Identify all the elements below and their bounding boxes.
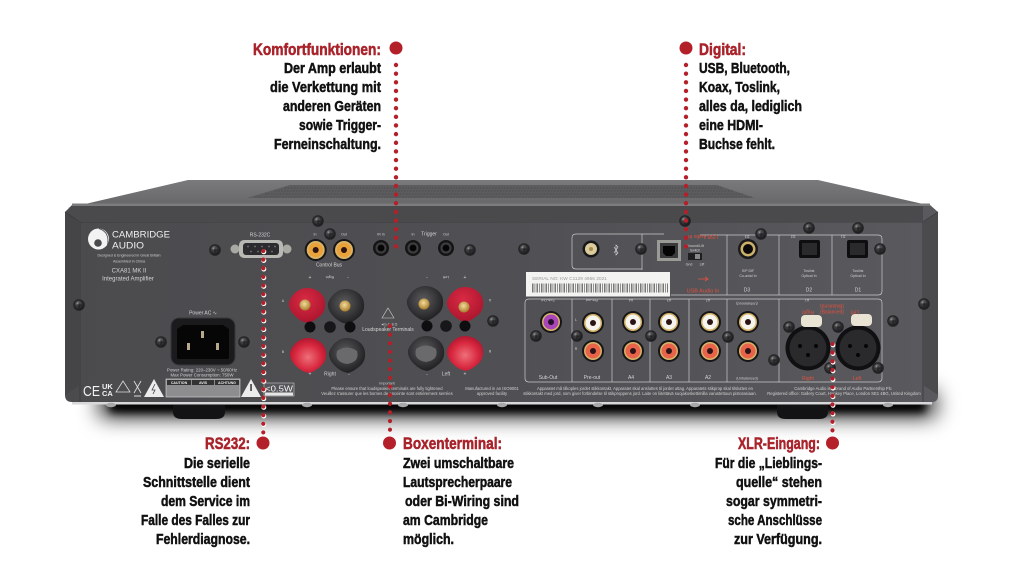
leader line: Boxenterminal [383,326,396,450]
serial number sticker: SERIAL NO: KW C1129 4956 2021 [532,276,607,282]
regulatory markings: <0.5W [265,384,293,394]
text block: XLR-Eingang: zur Verfügung. [734,532,822,548]
brand name: CAMBRIDGE [112,230,170,240]
IR and trigger jacks: IR In [377,232,385,236]
left speaker terminals [407,275,491,378]
text block: Komfortfunktionen: anderen Geräten [283,99,381,115]
pre-out sockets: R [575,347,578,351]
right speaker terminals [282,275,365,378]
regulatory markings: ACHTUNG [218,381,236,385]
USB panel: Switch [690,248,700,252]
power inlet: Max Power Consumption: 750W [171,372,234,378]
legal small print: Apparatet må tilkoples jordet stikkontakt. Apparatet skal ansluttes til jordet uttag. Apparatets stikprop skal tilsluttes en [537,386,754,391]
heading: Komfortfunktionen: Komfortfunktionen: [253,41,381,59]
A1 unbalanced sockets: (Unbalanced) [736,302,758,306]
D3 coaxial input: D3 [745,235,749,239]
Control Bus sockets: Out [341,232,347,236]
text block: XLR-Eingang: sogar symmetri- [726,494,822,510]
XLR sockets [786,298,880,382]
leader line: Komfortfunktionen [390,42,402,248]
chassis rear face [65,205,938,402]
A1 unbalanced sockets [736,302,759,380]
serial number sticker [526,272,670,296]
callout: Boxenterminal [403,435,519,548]
legal small print: approved facility [477,391,508,396]
D1 optical input [841,235,868,294]
digital input panels [727,235,882,295]
legal small print [321,382,921,396]
right speaker terminals: Right [324,372,336,378]
text block: Digital: alles da, lediglich [699,99,802,115]
USB panel: Ground/Lift [686,244,704,248]
A4 sockets [622,298,644,381]
USB panel: Lift [700,262,704,266]
power inlet [167,310,237,378]
right speaker terminals: Right [326,275,334,279]
text block: Boxenterminal [403,456,519,548]
XLR sockets: Left [850,309,859,315]
regulatory markings: CE [83,383,100,400]
text block: RS232 [141,456,250,548]
A2 sockets [699,298,721,381]
text block: RS232: Die serielle [184,456,250,472]
left speaker terminals: - [426,275,428,281]
XLR sockets: Right [802,376,814,382]
D2 optical input: D2 [806,288,812,294]
D3 coaxial input: D3 [744,288,750,294]
text block: RS232: Schnittstelle dient [143,475,250,491]
XLR sockets: A1 [805,298,809,302]
sub-out socket: Sub-Out [541,298,555,302]
A3 sockets: A3 [667,298,671,302]
model text: CXA81 MK II [112,268,147,274]
analog input panels [525,298,882,382]
XLR sockets: (Balanced) [820,310,844,316]
right speaker terminals: - [348,372,350,378]
regulatory markings: CA [102,389,113,398]
icon: Cambridge Audio logo [88,228,109,250]
text block: XLR-Eingang: Für die „Lieblings- [715,456,822,472]
IR and trigger jacks: Out [443,232,449,236]
text block: Boxenterminal: Lautsprecherpaare [403,475,512,491]
A3 sockets [658,298,680,381]
loudspeaker terminal label [362,308,414,333]
XLR sockets: Right [802,309,814,315]
panel screws [73,215,930,374]
text block: RS232: Falle des Falles zur [141,513,250,529]
bluetooth panel [572,234,642,269]
USB panel: Gnd [686,262,692,266]
regulatory markings: AVIS [199,381,208,385]
text block: Komfortfunktionen [270,61,381,153]
right speaker terminals: + [309,372,312,378]
legal small print: Veuillez s'assurer que les bornes de enceinte sont entièrement serrées [321,391,453,396]
legal small print: Registered office: Gallery Court, Hankey Place, London SE1 4BG, United Kingdom [767,391,921,396]
callout: Komfortfunktionen [253,41,381,153]
A2 sockets: A2 [705,375,711,381]
XLR sockets: Left [853,376,862,382]
brand name: AUDIO [112,240,144,252]
Control Bus sockets: Control Bus [316,262,343,268]
D2 optical input [791,235,820,294]
sub-out socket: Sub-Out [539,375,558,381]
D3 coaxial input [738,235,758,294]
RS-232C connector [230,232,292,258]
heading: RS232: RS232: [205,435,250,453]
text block: Boxenterminal: am Cambridge [403,513,488,529]
A2 sockets: A2 [706,298,710,302]
right speaker terminals: + [309,275,312,281]
A1 unbalanced sockets: (Unbalanced) [736,376,758,380]
XLR sockets: (Balanced) [820,303,844,309]
left speaker terminals: Left [443,275,449,279]
power inlet: Power AC ∿ [189,310,217,316]
text block: Komfortfunktionen: Ferneinschaltung. [274,137,381,153]
callout: XLR-Eingang [715,435,822,548]
right speaker terminals: A [282,299,285,303]
left speaker terminals: Left [442,372,451,378]
D2 optical input: Toslink [804,269,815,273]
text block: Digital: Buchse fehlt. [699,137,775,153]
pre-out sockets [575,298,604,381]
Control Bus sockets: In [314,232,316,236]
heading: Digital: Digital: [699,41,746,59]
D3 coaxial input: S/P DIF [742,269,755,273]
IR and trigger jacks: Trigger [421,232,437,238]
right speaker terminals: - [347,275,349,281]
amplifier feet [173,405,828,419]
text block: Boxenterminal: oder Bi-Wiring sind [405,494,519,510]
text block: Digital: USB, Bluetooth, [699,61,790,77]
A4 sockets: A4 [628,375,634,381]
left speaker terminals: + [464,372,467,378]
legal small print: Manufactured in an ISO9001 [465,386,519,391]
ventilation grille [247,185,755,198]
D1 optical input: D1 [841,235,845,239]
callout: RS232 [141,435,250,548]
brand name [112,230,170,252]
D1 optical input: D1 [855,288,861,294]
text block: RS232: dem Service im [161,494,250,510]
A4 sockets: A4 [629,298,633,302]
heading: Boxenterminal: Boxenterminal: [403,435,502,453]
leader line: XLR-Eingang [826,344,839,450]
text block: XLR-Eingang [715,456,822,548]
RS-232C connector: RS-232C [250,232,271,238]
brand block [88,228,170,282]
regulatory markings: UK [102,382,113,391]
text block: Digital: Koax, Toslink, [699,80,780,96]
text block: Komfortfunktionen: Der Amp erlaubt [284,61,381,77]
A3 sockets: A3 [666,375,672,381]
legal small print: Important [379,382,395,386]
IR and trigger jacks: In [412,232,414,236]
right speaker terminals: B [282,350,285,354]
text block: Boxenterminal: möglich. [403,532,454,548]
amplifier top cover [68,180,932,208]
USB panel [642,233,727,295]
left speaker terminals: + [464,275,467,281]
callout: Digital [699,41,802,153]
rubber nubs [106,403,893,407]
leader line: Digital [680,42,692,248]
model text: Designed & Engineered in Great Britain [98,254,160,258]
sub-out socket [539,298,562,381]
left speaker terminals: A [488,298,491,302]
legal small print: Cambridge Audio is a brand of Audio Partnership Plc [794,386,892,391]
pre-out sockets: L [575,318,577,322]
loudspeaker terminal label: Loudspeaker Terminals [362,327,414,333]
amplifier rear panel [65,180,938,407]
model text [98,254,160,282]
text block: RS232: Fehlerdiagnose. [156,532,250,548]
text block: Digital [699,61,802,153]
D1 optical input: Optical In [850,274,866,278]
text block: Boxenterminal: Zwei umschaltbare [403,456,514,472]
USB panel: USB Audio In [688,233,718,239]
text block: Komfortfunktionen: sowie Trigger- [299,118,381,134]
USB panel: USB Audio In [687,288,719,294]
model text: Assembled in China [113,260,145,264]
left speaker terminals: - [426,372,428,378]
text block: XLR-Eingang: sche Anschlüsse [728,513,822,529]
IR and trigger jacks [373,232,454,256]
legal small print: Please ensure that loudspeaker terminals are fully tightened [331,386,443,391]
D3 coaxial input: Co-axial In [739,274,757,278]
D1 optical input: Toslink [853,269,864,273]
D2 optical input: D2 [791,235,795,239]
text block: XLR-Eingang: quelle“ stehen [736,475,822,491]
power inlet: Power Rating: 220–230V ~ 50/60Hz [167,368,237,372]
text block: Komfortfunktionen: die Verkettung mit [270,80,381,96]
pre-out sockets: Pre-out [584,375,601,381]
regulatory markings: CAUTION [171,381,188,385]
heading: XLR-Eingang: XLR-Eingang: [738,435,820,453]
D2 optical input: Optical In [801,274,817,278]
floor shadow [100,392,935,416]
leader line: RS232 [256,251,270,450]
model text: Integrated Amplifier [102,276,154,282]
legal small print: stikkontakt med jord, som giver forbindelse til stikproppens jord. Laite on liitettävä suojakoskettimilla varustettuun pistorasiaan. [523,391,757,396]
pre-out sockets: Pre-out [586,298,598,302]
loudspeaker terminal label: ◄)) 4–8 Ω [381,322,398,326]
Control Bus sockets [305,232,355,268]
regulatory markings [83,379,294,400]
left speaker terminals: B [488,349,491,353]
text block: Digital: eine HDMI- [699,118,763,134]
